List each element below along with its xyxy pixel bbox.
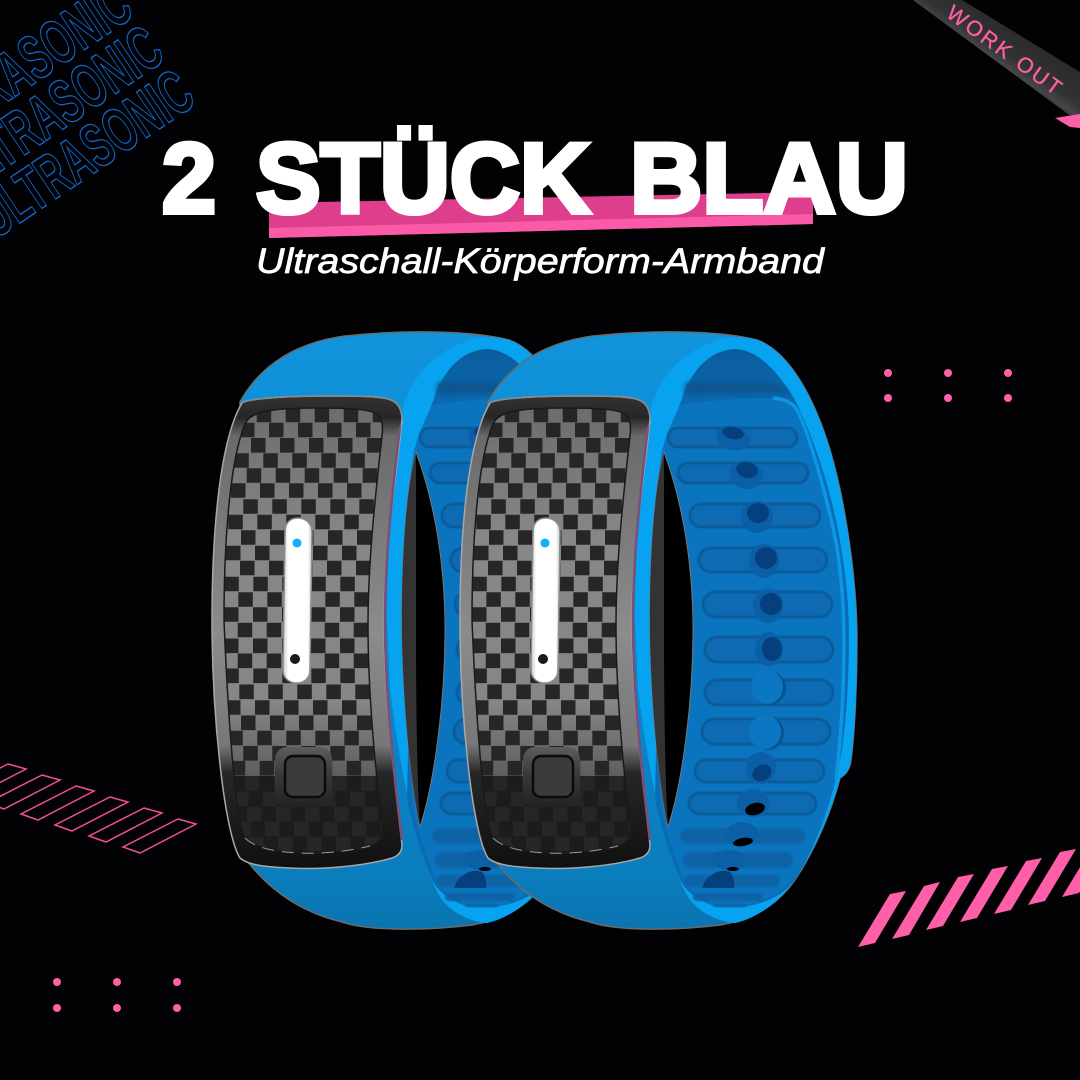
right band inner strap with slots: [635, 337, 857, 923]
right band square button: [523, 747, 580, 807]
corner ribbon: WORK OUT: [913, 0, 1080, 128]
subtitle: Ultraschall-Körperform-Armband: [256, 242, 826, 281]
title: [162, 122, 908, 234]
decorative outlined text: ULTRASONIC: [0, 0, 206, 252]
left band inner strap with slots: [387, 337, 609, 923]
right band white indicator pill: [531, 518, 560, 683]
pink dots: bottom left: [53, 978, 181, 1012]
right band outer surface: [488, 332, 857, 929]
pink dots: top right: [884, 369, 1012, 402]
solid stripes: bottom right: [858, 841, 1080, 947]
wristband: left: [195, 332, 609, 929]
left band white indicator pill: [283, 518, 312, 683]
corner ribbon: WORK OUT: WORK OUT: [942, 1, 1066, 100]
title: STÜCK: [256, 122, 590, 234]
title: 2: [162, 122, 216, 234]
left band square button: [275, 747, 332, 807]
outlined stripes: bottom left: [0, 764, 196, 853]
pink highlight bar behind title: [269, 192, 813, 238]
left band outer surface: [240, 332, 609, 929]
left band checkered face panel: [195, 396, 402, 869]
right band checkered face panel: [443, 396, 650, 869]
wristband: right: [443, 332, 857, 929]
title: BLAU: [630, 122, 908, 234]
